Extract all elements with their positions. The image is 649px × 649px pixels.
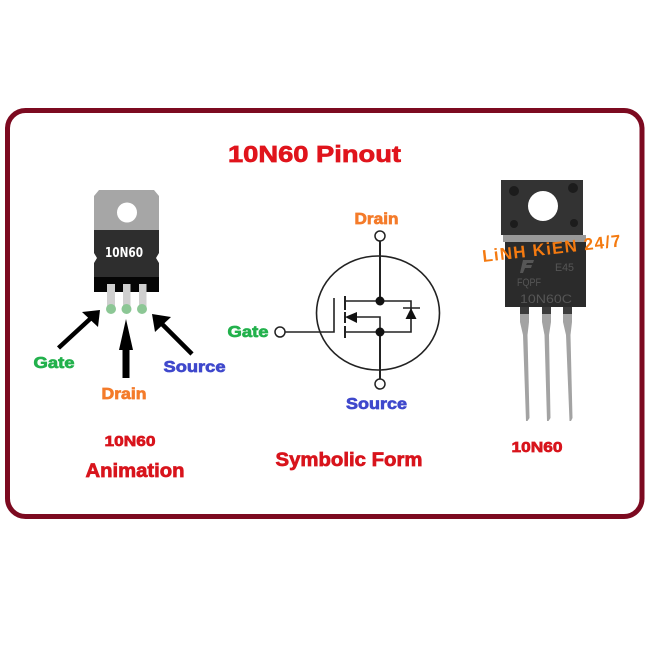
drain lead — [379, 241, 381, 301]
label: gate: Gate — [34, 355, 75, 372]
metal tab with mounting hole — [94, 190, 159, 231]
caption: symbolic form: Symbolic Form — [276, 450, 422, 471]
caption: photo 10N60: 10N60 — [512, 439, 562, 456]
body connection — [357, 317, 380, 332]
transistor body — [94, 230, 159, 292]
photo: real transistor — [501, 180, 586, 421]
terminals — [275, 231, 385, 389]
tab with hole — [501, 180, 583, 235]
package markings: 10N60C — [520, 292, 572, 306]
panel: rounded border frame — [8, 110, 642, 516]
label: symbol gate: Gate — [228, 324, 269, 341]
body lower band — [94, 277, 159, 292]
leads — [520, 307, 572, 421]
diagram: MOSFET symbol — [275, 231, 440, 389]
package markings — [517, 260, 574, 306]
tab rivets — [509, 183, 578, 228]
package body — [505, 242, 586, 307]
gray band — [503, 235, 586, 242]
source lead — [379, 332, 381, 379]
caption: animation: Animation — [86, 461, 184, 482]
gate lead — [285, 298, 334, 332]
lead shoulders — [520, 307, 572, 314]
title: 10N60 Pinout — [228, 141, 401, 167]
label: drain: Drain — [102, 386, 146, 403]
caption: 10N60: 10N60 — [104, 433, 156, 450]
junction dots — [376, 296, 384, 336]
package markings: E45 — [555, 262, 574, 274]
channel segments — [344, 296, 346, 338]
watermark: LiNH KiEN 24/7 — [481, 231, 622, 266]
package markings: FQPF — [517, 277, 541, 289]
drain and source rails — [345, 301, 411, 332]
label: symbol source: Source — [346, 396, 407, 413]
body marking: 10N60 — [105, 245, 143, 261]
pin dots — [106, 304, 147, 314]
diode — [403, 308, 420, 319]
arrow: drain — [119, 319, 133, 378]
label: source: Source — [164, 359, 226, 376]
arrow: gate — [58, 310, 100, 348]
enclosure circle — [316, 256, 440, 370]
illustration: animated transistor — [94, 190, 159, 314]
body arrow — [345, 312, 357, 323]
label: symbol drain: Drain — [354, 211, 398, 228]
arrow: source — [152, 314, 192, 354]
pins — [107, 284, 146, 309]
